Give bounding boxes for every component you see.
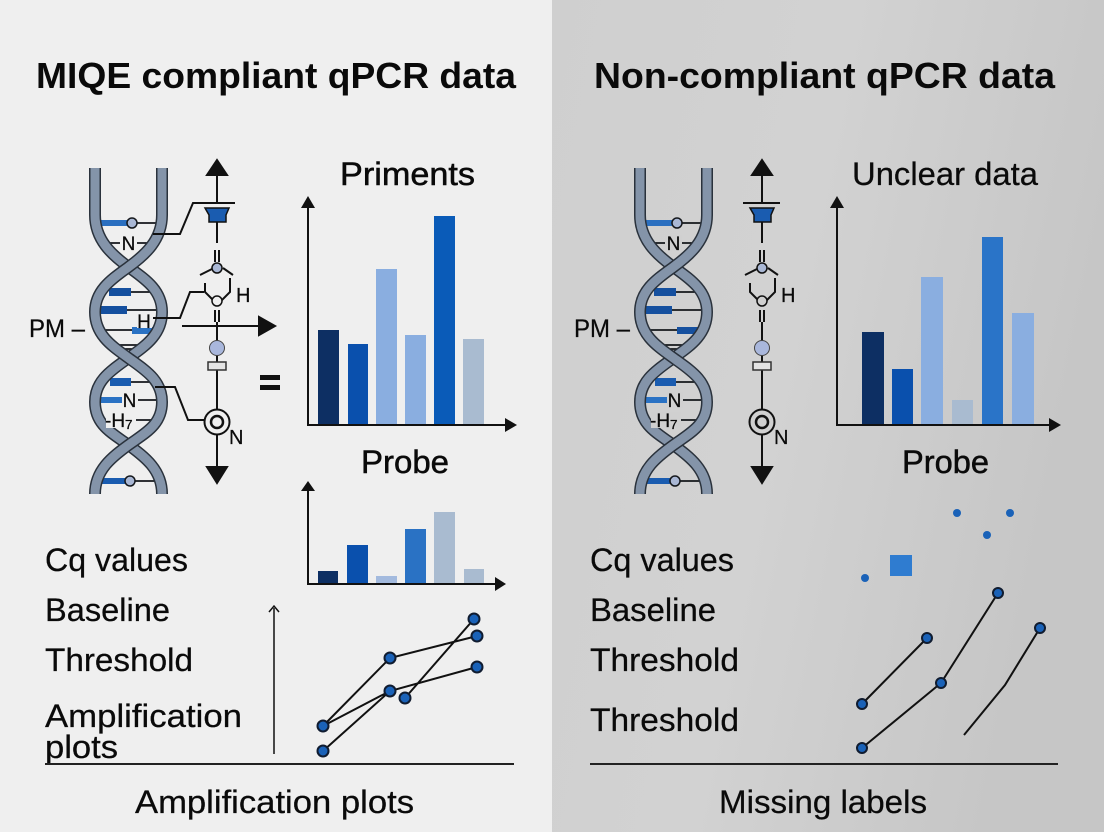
heading: Probe left: Probe bbox=[361, 444, 449, 480]
icon: DNA helix right: -H₇ bbox=[650, 407, 678, 432]
labels: right metrics: Threshold bbox=[590, 702, 739, 738]
scatter: stray points bbox=[861, 509, 1014, 582]
labels: left metrics: Cq values bbox=[45, 542, 188, 578]
icon: DNA helix left bbox=[95, 168, 162, 494]
caption: Amplification plots: Amplification plots bbox=[135, 784, 414, 820]
label: PM: PM – bbox=[29, 315, 85, 343]
heading: Probe right: Probe bbox=[902, 444, 989, 480]
labels: left metrics: Baseline bbox=[45, 592, 170, 628]
labels: left metrics: Amplification bbox=[45, 698, 242, 734]
icon: DNA helix right: N bbox=[667, 234, 680, 255]
labels: right metrics: Baseline bbox=[590, 592, 716, 628]
icon: DNA helix left: H bbox=[137, 312, 151, 333]
icon: DNA helix left: N bbox=[123, 391, 136, 412]
bar chart: Probe bbox=[301, 481, 506, 591]
labels: left metrics: plots bbox=[45, 729, 118, 765]
labels: left metrics bbox=[45, 542, 242, 765]
caption: Missing labels: Missing labels bbox=[719, 784, 927, 820]
label: N right: N bbox=[774, 427, 788, 449]
icon: probe schematic right bbox=[743, 160, 780, 483]
labels: right metrics: Threshold bbox=[590, 642, 739, 678]
panel: left background bbox=[0, 0, 552, 832]
equals sign bbox=[260, 375, 280, 390]
heading: Priments: Priments bbox=[340, 156, 475, 192]
icon: DNA helix left: -H₇ bbox=[105, 407, 133, 432]
icon: DNA helix right bbox=[640, 168, 707, 494]
bar chart: Unclear data bbox=[830, 196, 1061, 432]
line chart: amplification plot right bbox=[857, 588, 1045, 753]
panel: right background bbox=[552, 0, 1104, 832]
icon: probe schematic left bbox=[153, 160, 275, 483]
title: non-compliant: Non-compliant qPCR data bbox=[594, 55, 1056, 96]
label: H: H bbox=[236, 285, 250, 307]
labels: right metrics: Cq values bbox=[590, 542, 734, 578]
baseline rule right bbox=[590, 763, 1058, 765]
labels: right metrics bbox=[590, 542, 739, 738]
heading: Unclear data: Unclear data bbox=[852, 156, 1038, 192]
labels: left metrics: Threshold bbox=[45, 642, 193, 678]
label: PM right: PM – bbox=[574, 315, 630, 343]
icon: DNA helix right: N bbox=[668, 391, 681, 412]
line chart: amplification plot left bbox=[269, 606, 482, 756]
baseline rule left bbox=[45, 763, 514, 765]
label: N: N bbox=[229, 427, 243, 449]
label: H right: H bbox=[781, 285, 795, 307]
title: MIQE compliant: MIQE compliant qPCR data bbox=[36, 55, 517, 96]
icon: DNA helix left: N bbox=[122, 234, 135, 255]
bar chart: Priments bbox=[301, 196, 517, 432]
